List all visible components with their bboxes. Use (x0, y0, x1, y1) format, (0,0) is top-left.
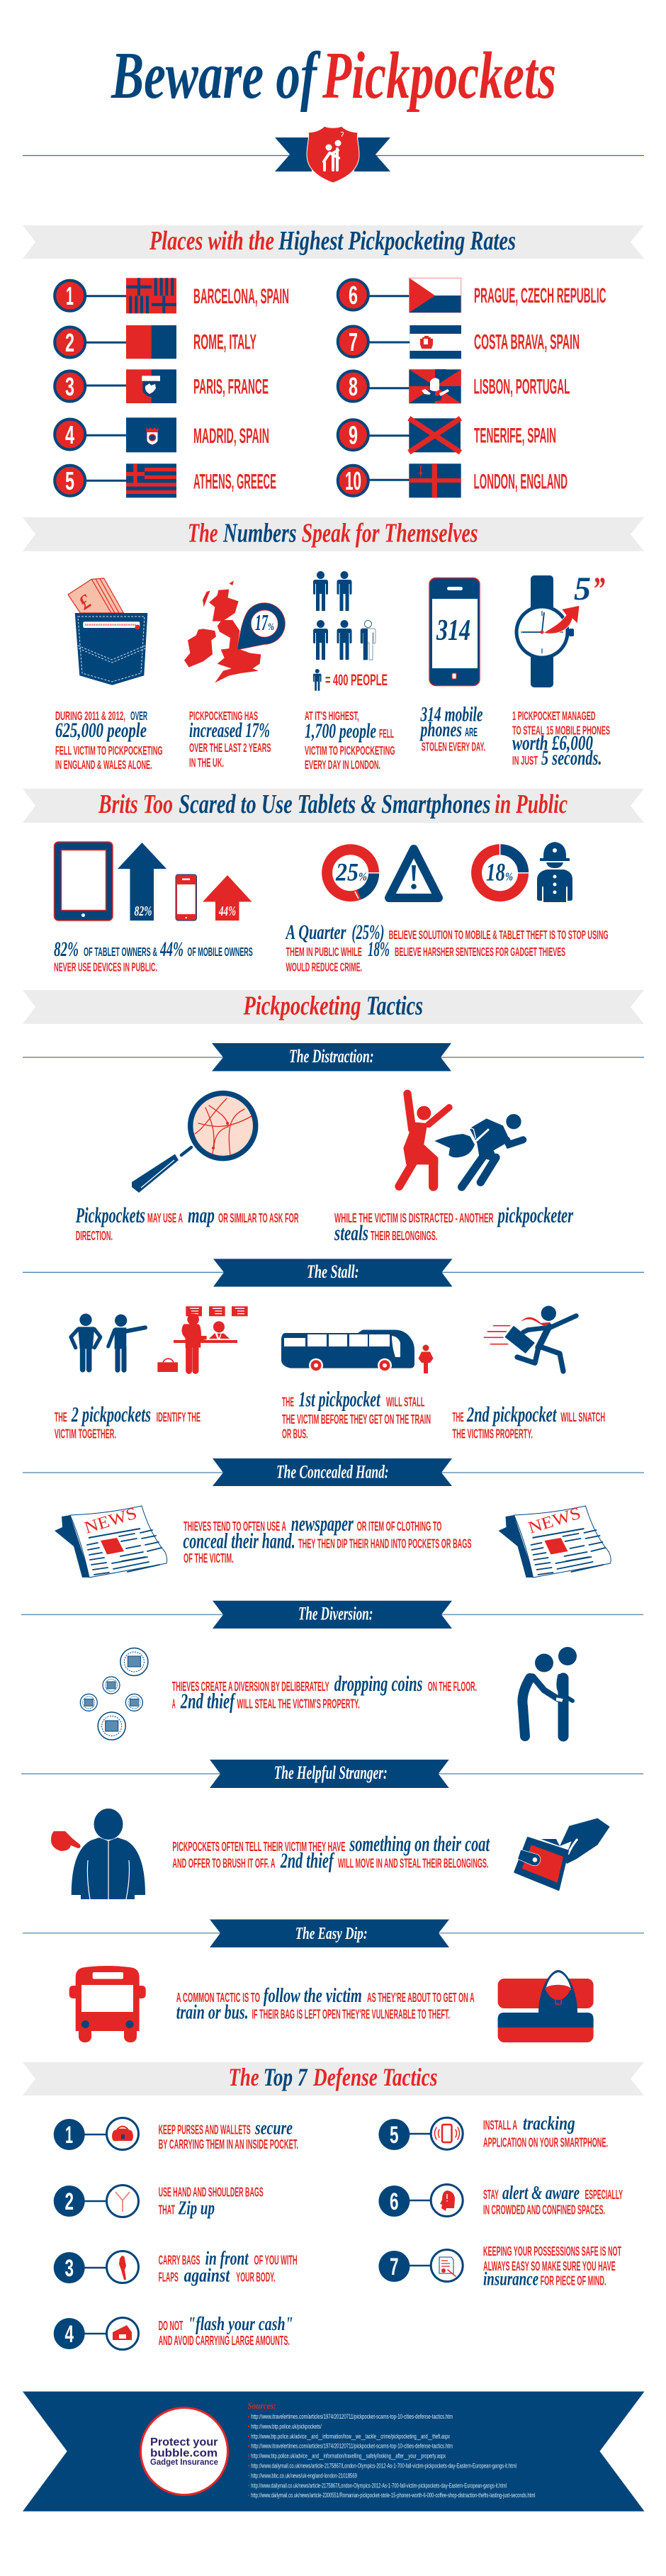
ribbon: the distraction: The Distraction: (289, 1046, 374, 1067)
distraction text: OR SIMILAR TO ASK FOR (218, 1211, 299, 1225)
stall text middle: THE (282, 1395, 294, 1409)
banner: numbers heading: The (188, 519, 218, 549)
logo: Protect your bubble.com: bubble.com (150, 2448, 218, 2460)
icon: running thief (484, 1306, 576, 1371)
footer banner (23, 2392, 645, 2512)
icon: front of red bus (69, 1966, 146, 2042)
tactic 2 (54, 2186, 264, 2219)
tactic 2: 2 (65, 2188, 74, 2215)
ribbon: the helpful stranger (21, 1760, 643, 1788)
stall text right: THE VICTIMS PROPERTY. (452, 1427, 533, 1441)
ribbon: the distraction (23, 1043, 644, 1072)
icon: warning triangle (389, 849, 439, 898)
banner: numbers heading (23, 517, 644, 551)
ribbon: the helpful stranger: The Helpful Stranger: (274, 1762, 388, 1783)
stat text two: PICKPOCKETING HAS (189, 709, 258, 723)
icon: open bag on seat (498, 1970, 594, 2042)
icon: wristwatch with red arrow: ” (592, 570, 605, 607)
banner: tactics heading: Tactics (366, 991, 423, 1021)
row 10 London: 10 (345, 466, 361, 495)
tactic 1 (54, 2117, 298, 2152)
banner: places heading: Highest Pickpocketing Rates (278, 226, 516, 256)
concealed hand text: newspaper (291, 1511, 354, 1536)
helpful stranger text: PICKPOCKETS OFTEN TELL THEIR VICTIM THEY HAVE (172, 1840, 345, 1854)
stall text middle: THE VICTIM BEFORE THEY GET ON THE TRAIN (282, 1412, 431, 1427)
row 4 Madrid (55, 417, 269, 452)
stat text four: ARE (465, 725, 478, 739)
sources list: http://www.bbc.co.uk/news/uk-england-london-21018569 (251, 2472, 357, 2479)
tactic 1: 1 (65, 2122, 73, 2149)
panel: top 10 cities list (55, 278, 606, 497)
row 6 Prague: 6 (349, 281, 358, 310)
panel: defense tactics list (54, 2113, 623, 2350)
stall text middle: WILL STALL (386, 1395, 425, 1409)
banner: defense tactics heading: The (228, 2063, 259, 2091)
panel: statistic five, watch (512, 570, 610, 770)
distraction text: map (188, 1203, 215, 1227)
concealed hand text (183, 1511, 472, 1565)
easy dip text: A COMMON TACTIC IS TO (176, 1991, 260, 2005)
stat text four (419, 703, 485, 754)
stat text one: DURING 2011 & 2012, (55, 709, 125, 723)
panel: the distraction (75, 1093, 574, 1245)
easy dip text (176, 1985, 475, 2023)
tactic 4 (54, 2313, 293, 2350)
sources list: http://www.dailymail.co.uk/news/article-2175867/London-Olympics-2012-As-1-700-fall-victim-pickpockets-day-Eastern-European-gangs-it.html (251, 2462, 517, 2469)
tactic 3: in front (205, 2247, 249, 2268)
stat text two: increased 17% (189, 719, 270, 742)
stat text three: 1,700 people (305, 719, 376, 743)
distraction text: MAY USE A (147, 1211, 183, 1225)
panel: the diversion (80, 1647, 577, 1740)
distraction text: DIRECTION. (76, 1229, 113, 1243)
icon: pocket with banknotes: £ (74, 590, 96, 614)
panel: statistic two, UK map (184, 580, 285, 770)
tactic 1: KEEP PURSES AND WALLETS (159, 2122, 251, 2137)
stat text five: worth £6,000 (512, 731, 593, 755)
logo: Protect your bubble.com: Protect your (150, 2436, 218, 2448)
helpful stranger text: something on their coat (349, 1831, 490, 1856)
icon: magnifying glass over map (132, 1093, 256, 1193)
icon: UK map with 17 percent pin (184, 580, 285, 682)
tactic 3: CARRY BAGS (159, 2253, 200, 2267)
banner: places heading (23, 225, 644, 259)
distraction text: steals (334, 1220, 368, 1245)
stat text three: FELL (379, 726, 394, 741)
banner: defense tactics heading: Top 7 (264, 2063, 308, 2091)
panel: statistic one, jeans pocket (55, 578, 163, 772)
stall text left (55, 1402, 201, 1441)
stat text two: IN THE UK. (189, 755, 224, 770)
sources list: http://www.btp.police.uk/advice__and__information/how__we__tackle__crime/pickpocketing__and__theft.aspx (251, 2433, 450, 2440)
logo: Protect your bubble.com (140, 2408, 228, 2495)
sources list: http://www.btp.police.uk/pickpockets/ (251, 2423, 322, 2430)
chart: 18 percent donut (477, 843, 529, 896)
ribbon: the concealed hand (23, 1458, 644, 1486)
easy dip text: train or bus. (176, 2001, 249, 2023)
text: ESPECIALLY (585, 2188, 623, 2202)
banner: brits scared heading: Scared to Use Tablets & Smartphones (179, 789, 490, 819)
icon: newspaper left: NEWS (82, 1504, 139, 1538)
tactic 3: against (184, 2265, 230, 2286)
stall text middle: 1st pickpocket (299, 1386, 380, 1411)
logo: Protect your bubble.com: Gadget Insurance (150, 2457, 218, 2467)
panel: the easy dip (69, 1966, 594, 2042)
ribbon: the diversion (21, 1601, 643, 1629)
device owners text: 44% (159, 938, 184, 961)
distraction text (75, 1203, 574, 1245)
ribbon: the diversion: The Diversion: (298, 1603, 373, 1624)
device owners text: OF TABLET OWNERS & (84, 945, 157, 959)
chart: 25 percent donut: 25 (335, 858, 359, 887)
icon: tablet (54, 842, 113, 921)
stall text left: THE (55, 1410, 67, 1424)
banner: defense tactics heading (23, 2062, 644, 2096)
tactic 7 (378, 2244, 621, 2290)
sources list: http://www.btp.police.uk/advice__and__information/travelling__safely/looking__after__your__property.aspx (251, 2453, 446, 2460)
stat text five (512, 709, 610, 770)
public opinion text: WOULD REDUCE CRIME. (286, 960, 362, 974)
concealed hand text: THIEVES TEND TO OFTEN USE A (184, 1519, 286, 1534)
device owners text: 82% (54, 938, 79, 961)
banner: tactics heading: Pickpocketing (243, 991, 361, 1021)
title: Pickpockets (322, 39, 556, 113)
helpful stranger text: 2nd thief (280, 1848, 334, 1872)
row 2 Rome: 2 (65, 328, 74, 357)
banner: brits scared heading (23, 789, 644, 823)
stall text middle: OR BUS. (282, 1427, 308, 1441)
concealed hand text: THEY THEN DIP THEIR HAND INTO POCKETS OR BAGS (298, 1536, 472, 1551)
tactic 5: 5 (390, 2122, 398, 2149)
stat text four: 314 mobile (420, 703, 483, 726)
row 5 Athens (55, 463, 276, 497)
icon: wristwatch with red arrow: 5 (574, 570, 591, 607)
icon: scattered coins (80, 1648, 148, 1740)
public opinion text: 18% (368, 938, 390, 961)
panel: public opinion donuts (285, 842, 609, 974)
panel: defense tactics list: USE HAND AND SHOULDER BAGS (159, 2186, 264, 2200)
diversion text: A (172, 1697, 176, 1711)
icon: man in hooded jacket with pointing red hand (51, 1809, 145, 1899)
tactic 2: Zip up (178, 2198, 215, 2219)
device owners text: OF MOBILE OWNERS (187, 945, 253, 959)
distraction text: THEIR BELONGINGS. (371, 1229, 438, 1243)
chart: 18 percent donut: % (505, 870, 513, 884)
diversion text: dropping coins (334, 1671, 422, 1696)
icon: newspaper left (55, 1504, 167, 1577)
stat text four: STOLEN EVERY DAY. (422, 740, 485, 754)
panel: the diversion: ON THE FLOOR. (428, 1680, 477, 1694)
banner: brits scared heading: Brits Too (98, 789, 173, 819)
icon: pocket with banknotes (68, 578, 147, 685)
tactic 1: BY CARRYING THEM IN AN INSIDE POCKET. (159, 2137, 298, 2152)
icon: hand taking wallet (515, 1818, 610, 1890)
panel: top 10 cities list: TENERIFE, SPAIN (474, 424, 556, 447)
ribbon: the stall (23, 1259, 644, 1287)
chart: 18 percent donut: 18 (486, 858, 505, 887)
diversion text: 2nd thief (180, 1689, 236, 1714)
stat text five: IN JUST (512, 753, 538, 767)
stat text three: VICTIM TO PICKPOCKETING (305, 743, 395, 758)
stat text three: AT IT'S HIGHEST, (305, 709, 359, 723)
ribbon: the stall: The Stall: (307, 1261, 359, 1282)
tactic 3: FLAPS (159, 2271, 179, 2285)
chart: 25 percent donut (327, 850, 380, 899)
icon: thief reaching into pocket (522, 1647, 577, 1736)
panel: top 10 cities list: PARIS, FRANCE (193, 376, 269, 398)
icon: newspaper right (499, 1504, 611, 1577)
public opinion text: (25%) (351, 921, 385, 944)
tactic 5: INSTALL A (483, 2118, 517, 2132)
chart arrow: tablet owners 82 percent: 82% (135, 904, 152, 919)
title: Beware of (111, 39, 321, 113)
banner: numbers heading: Speak for Themselves (302, 519, 478, 549)
tactic 4: "flash your cash" (188, 2313, 293, 2334)
banner: places heading: Places with the (149, 226, 274, 256)
panel: the stall (55, 1306, 605, 1441)
diversion text: WILL STEAL THE VICTIM'S PROPERTY. (237, 1697, 360, 1711)
diversion text (172, 1671, 477, 1714)
icon: newspaper right: NEWS (526, 1504, 583, 1538)
tactic 3: 3 (65, 2255, 74, 2282)
row 1 Barcelona (55, 278, 289, 313)
panel: top 10 cities list: BARCELONA, SPAIN (193, 285, 289, 308)
tactic 4: 4 (65, 2321, 74, 2348)
chart arrow: mobile owners 44 percent: 44% (218, 904, 236, 919)
stall text left: IDENTIFY THE (157, 1410, 201, 1424)
stat text four: phones (419, 718, 462, 741)
tactic 7: insurance (483, 2268, 538, 2290)
tactic 7: 7 (390, 2254, 398, 2280)
row 4 Madrid: 4 (65, 420, 74, 449)
sources list (248, 2400, 535, 2499)
icon: bus and victim (281, 1329, 434, 1373)
icon: phone showing 314: 314 (436, 614, 470, 647)
device owners text: NEVER USE DEVICES IN PUBLIC. (54, 960, 157, 974)
stat text three: EVERY DAY IN LONDON. (305, 758, 380, 772)
panel: top 10 cities list: MADRID, SPAIN (193, 424, 269, 448)
row 3 Paris (55, 369, 269, 403)
row 7 Costa Brava: 7 (349, 327, 358, 356)
icon: people pictogram: = 400 PEOPLE (325, 671, 388, 689)
tactic 6 (378, 2182, 623, 2217)
sources list: http://www.itravelertimes.com/articles/1974/20120711/pickpocket-scams-top-10-cities-defense-tactics.htm (251, 2413, 453, 2420)
helpful stranger text: WILL MOVE IN AND STEAL THEIR BELONGINGS. (338, 1857, 489, 1871)
row 10 London (338, 463, 568, 497)
easy dip text: AS THEY'RE ABOUT TO GET ON A (367, 1991, 475, 2005)
stat text three (305, 709, 395, 772)
sources list: http://www.itravelertimes.com/articles/1974/20120711/pickpocket-scams-top-10-cities-defense-tactics.htm (251, 2443, 453, 2450)
row 6 Prague (338, 278, 606, 313)
row 7 Costa Brava (338, 325, 580, 359)
chart: 25 percent donut: % (359, 870, 367, 884)
row 9 Tenerife (338, 418, 556, 452)
row 2 Rome (55, 325, 256, 359)
icon: police officer (537, 842, 572, 902)
stall text right: 2nd pickpocket (466, 1402, 557, 1427)
panel: top 10 cities list: ATHENS, GREECE (193, 471, 276, 494)
row 1 Barcelona: 1 (66, 281, 74, 310)
sources list: Sources: (248, 2400, 276, 2411)
stat text one: 625,000 people (55, 719, 147, 742)
row 5 Athens: 5 (65, 466, 74, 495)
icon: wristwatch with red arrow (514, 570, 605, 687)
row 3 Paris: 3 (65, 372, 74, 401)
tactic 6: STAY (483, 2188, 499, 2202)
easy dip text: follow the victim (264, 1985, 362, 2007)
chart arrow: mobile owners 44 percent (203, 875, 252, 921)
tactic 6: alert & aware (502, 2182, 580, 2203)
public opinion text: A Quarter (285, 921, 346, 944)
helpful stranger text: AND OFFER TO BRUSH IT OFF. A (172, 1857, 275, 1871)
concealed hand text: conceal their hand. (183, 1528, 295, 1553)
row 8 Lisbon (338, 369, 570, 403)
public opinion text (285, 921, 609, 974)
stall text right: THE (452, 1410, 464, 1424)
easy dip text: IF THEIR BAG IS LEFT OPEN THEY'RE VULNERABLE TO THEFT. (252, 2007, 450, 2021)
stat text five: 5 seconds. (541, 746, 602, 770)
panel: statistic three, people pictogram (305, 571, 395, 772)
device owners text (54, 938, 253, 974)
stall text right: WILL SNATCH (560, 1410, 605, 1424)
icon: people pictogram (313, 571, 388, 691)
tactic 5: tracking (523, 2113, 575, 2134)
sources list: http://www.dailymail.co.uk/news/article-2175867/London-Olympics-2012-As-1-700-fall-victim-pickpockets-day-Eastern-European-gangs-it.html (251, 2482, 507, 2489)
ribbon: the easy dip: The Easy Dip: (295, 1925, 368, 1943)
ribbon: the concealed hand: The Concealed Hand: (276, 1461, 389, 1482)
distraction text: pickpocketer (497, 1203, 574, 1227)
distraction text: Pickpockets (75, 1203, 145, 1227)
concealed hand text: OF THE VICTIM. (184, 1551, 234, 1565)
panel: statistic four, phone (419, 578, 485, 754)
distraction text: WHILE THE VICTIM IS DISTRACTED - ANOTHER (334, 1211, 494, 1225)
ribbon: the easy dip (23, 1919, 644, 1947)
tactic 3: YOUR BODY. (236, 2271, 275, 2285)
tactic 4: DO NOT (159, 2319, 183, 2333)
public opinion text: THEM IN PUBLIC WHILE (286, 945, 362, 959)
tactic 1: secure (254, 2117, 293, 2138)
panel: device owners chart (54, 842, 253, 974)
icon: UK map with 17 percent pin: % (268, 621, 274, 633)
title (111, 39, 556, 113)
icon: shield emblem with ribbon (275, 126, 390, 183)
tactic 2: THAT (159, 2203, 175, 2217)
stat text two (189, 709, 271, 770)
panel: the helpful stranger (51, 1809, 610, 1899)
icon: two pickpockets and victim at counter (71, 1306, 248, 1372)
banner: tactics heading (23, 990, 644, 1024)
stat text one: IN ENGLAND & WALES ALONE. (55, 758, 152, 772)
panel: the concealed hand (55, 1504, 611, 1577)
tactic 4: AND AVOID CARRYING LARGE AMOUNTS. (159, 2334, 290, 2348)
tactic 3 (54, 2247, 298, 2286)
helpful stranger text (172, 1831, 490, 1872)
stall text right (452, 1402, 605, 1441)
stall text left: VICTIM TOGETHER. (55, 1427, 116, 1441)
diversion text: THIEVES CREATE A DIVERSION BY DELIBERATELY (172, 1680, 329, 1694)
stall text left: 2 pickpockets (71, 1402, 151, 1427)
stat text one: OVER (130, 709, 147, 723)
row 9 Tenerife: 9 (349, 421, 358, 449)
tactic 5 (378, 2113, 608, 2150)
concealed hand text: OR ITEM OF CLOTHING TO (357, 1519, 442, 1534)
stall text middle (282, 1386, 431, 1441)
banner: defense tactics heading: Defense Tactics (312, 2063, 438, 2091)
tactic 6: 6 (390, 2188, 398, 2215)
panel: top 10 cities list: ROME, ITALY (193, 331, 256, 354)
stat text one: FELL VICTIM TO PICKPOCKETING (55, 743, 163, 758)
stat text one (55, 709, 163, 772)
icon: distracted victim and thief (399, 1093, 523, 1187)
stat text two: OVER THE LAST 2 YEARS (189, 741, 271, 755)
chart arrow: tablet owners 82 percent (118, 843, 166, 921)
icon: small phone (176, 874, 197, 921)
icon: UK map with 17 percent pin: 17 (255, 609, 269, 635)
banner: brits scared heading: in Public (495, 789, 568, 819)
tactic 3: OF YOU WITH (254, 2253, 298, 2267)
row 8 Lisbon: 8 (349, 372, 358, 401)
banner: numbers heading: Numbers (222, 519, 296, 549)
header line (23, 154, 644, 156)
icon: phone showing 314 (429, 578, 480, 686)
